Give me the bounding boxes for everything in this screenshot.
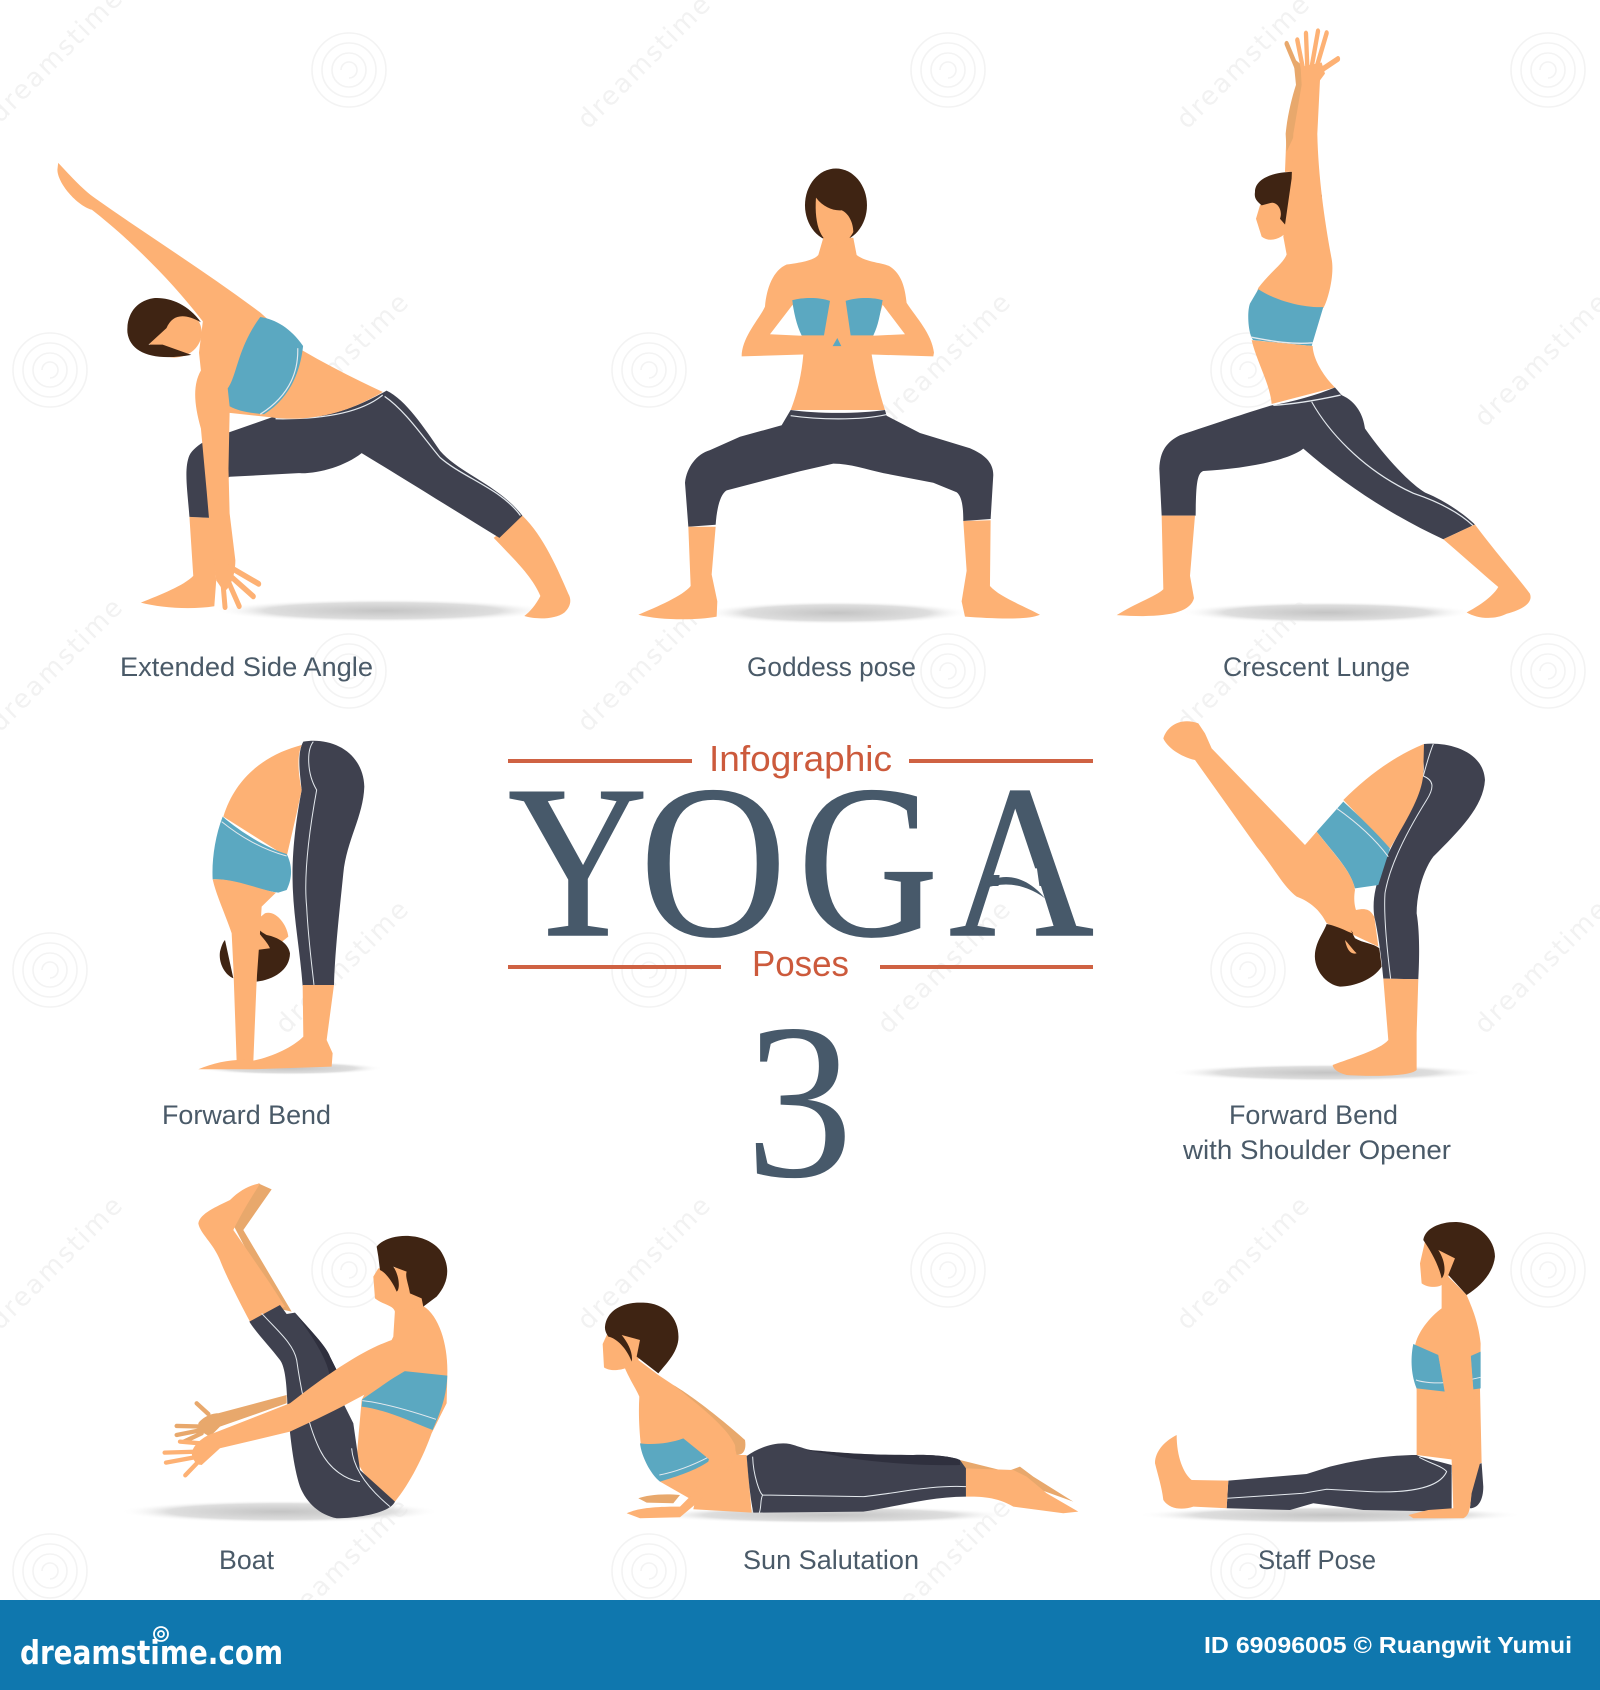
arm <box>213 879 276 1062</box>
near arm <box>627 1390 735 1518</box>
watermark text: dreamstime <box>1171 1191 1316 1336</box>
pose labels: Forward Bend <box>162 1100 331 1130</box>
hand fingers <box>223 567 259 607</box>
arm gaps <box>770 305 905 336</box>
pose labels: Sun Salutation <box>743 1545 919 1575</box>
torso <box>357 1306 447 1502</box>
pants <box>1374 744 1485 979</box>
pose: goddess <box>638 169 1040 624</box>
pose: boat <box>120 1183 447 1523</box>
face <box>257 913 288 953</box>
back <box>1343 744 1424 848</box>
pose: extended side angle <box>57 163 570 622</box>
title: yoga: G <box>798 741 938 983</box>
leg and foot <box>1155 1435 1228 1509</box>
logo text: dreamstime.com <box>20 1633 283 1672</box>
footer banner <box>0 1600 1600 1690</box>
pose labels: Extended Side Angle <box>120 652 373 682</box>
title: yoga <box>508 740 1094 983</box>
hair <box>1423 1222 1495 1295</box>
top <box>640 1438 710 1482</box>
watermark text: dreamstime <box>572 593 717 738</box>
title: yoga: O <box>640 740 786 983</box>
pants <box>1227 1455 1483 1512</box>
pose labels: with Shoulder Opener <box>1182 1135 1451 1165</box>
top <box>212 817 291 893</box>
subtitle: infographic: Infographic <box>709 738 892 779</box>
logo spiral <box>154 1627 168 1641</box>
pose: forward bend with shoulder opener <box>1163 721 1485 1081</box>
watermark text: dreamstime <box>1171 593 1316 738</box>
torso and arms <box>742 238 934 410</box>
head <box>147 308 202 358</box>
face <box>816 198 853 245</box>
pose labels: Boat <box>219 1545 275 1575</box>
pose labels: Staff Pose <box>1258 1545 1376 1575</box>
watermark text: dreamstime <box>270 288 415 433</box>
legs <box>638 520 1040 619</box>
top <box>1412 1344 1481 1392</box>
near foot and calf <box>966 1468 1078 1513</box>
far arm <box>638 1385 745 1503</box>
face and neck <box>373 1267 425 1312</box>
foot <box>198 985 334 1069</box>
hair <box>805 169 867 242</box>
midriff <box>1252 340 1335 404</box>
hair <box>377 1236 447 1307</box>
pose: sun salutation <box>603 1303 1078 1524</box>
pants <box>293 741 364 986</box>
credit: ID 69096005 © Ruangwit Yumui <box>1204 1632 1572 1658</box>
swoosh on letter A <box>985 868 1045 898</box>
top <box>362 1371 447 1430</box>
leg and foot <box>1333 979 1418 1076</box>
pose: staff <box>1137 1222 1523 1524</box>
rule lines <box>508 759 1093 969</box>
far arm <box>198 1395 287 1437</box>
legs <box>1117 516 1531 618</box>
top <box>1317 802 1390 888</box>
hand fingers <box>1297 31 1338 71</box>
pose labels <box>120 652 1451 1575</box>
pose labels: Crescent Lunge <box>1223 652 1410 682</box>
title: yoga: A <box>949 741 1094 983</box>
pose labels: Forward Bend <box>1229 1100 1398 1130</box>
pose: forward bend <box>197 741 383 1075</box>
number 3: 3 <box>746 979 853 1225</box>
back arm lower <box>1285 129 1297 172</box>
back foot <box>494 516 570 618</box>
pose: crescent lunge <box>1117 31 1531 623</box>
near leg <box>198 1183 285 1322</box>
pants <box>685 410 993 527</box>
top <box>228 317 303 414</box>
hair <box>605 1303 678 1373</box>
body and face <box>1413 1242 1482 1463</box>
far foot and calf <box>960 1460 1073 1502</box>
body and raised arm <box>57 163 383 591</box>
watermark text: dreamstime <box>270 1493 415 1638</box>
face <box>1256 187 1290 240</box>
subtitle: poses: Poses <box>752 943 849 984</box>
near arm <box>192 1338 407 1465</box>
pants <box>186 391 522 538</box>
arm and torso <box>1250 62 1332 312</box>
top <box>792 298 883 346</box>
top <box>1248 289 1323 346</box>
title: yoga: Y <box>508 740 648 983</box>
pants <box>1159 387 1475 539</box>
arm <box>1408 1327 1480 1518</box>
hair <box>1315 924 1382 987</box>
front foot <box>141 517 216 608</box>
body <box>603 1332 752 1513</box>
arm and neck <box>1163 721 1378 947</box>
hair <box>1255 172 1293 232</box>
title block <box>508 738 1094 1225</box>
pose labels: Goddess pose <box>747 652 916 682</box>
watermark text: dreamstime <box>872 1493 1017 1638</box>
hair <box>220 927 290 982</box>
watermark text: dreamstime <box>270 895 415 1040</box>
back arm shade <box>1286 58 1310 152</box>
watermark text: dreamstime <box>872 288 1017 433</box>
watermark text: dreamstime <box>872 895 1017 1040</box>
hair behind <box>1313 185 1322 212</box>
far leg <box>233 1183 292 1312</box>
pants <box>747 1443 966 1513</box>
back <box>223 745 302 857</box>
watermark text: dreamstime <box>572 1191 717 1336</box>
pants <box>249 1305 395 1518</box>
